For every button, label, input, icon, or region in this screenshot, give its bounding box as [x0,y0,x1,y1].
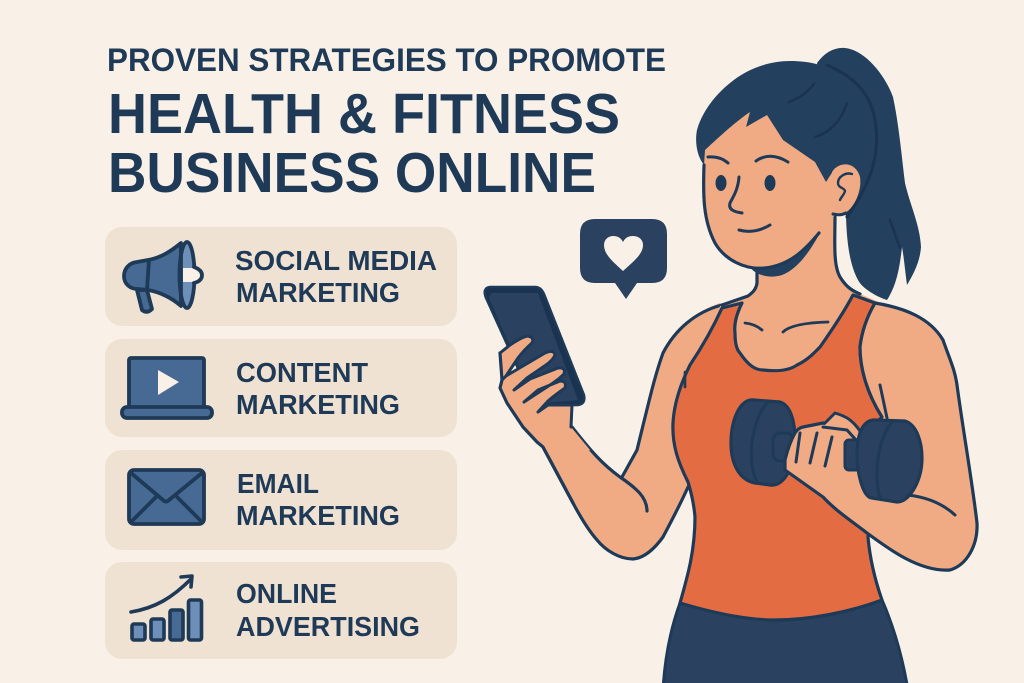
phone [485,287,584,406]
title line 3: BUSINESS ONLINE [108,141,596,205]
illustration: woman with phone and dumbbell [485,48,977,683]
icon: growth chart [131,576,202,640]
dumbbell left plate and handle [731,400,795,485]
label: MARKETING [236,277,400,308]
label: ONLINE [236,578,337,609]
icon: megaphone [124,242,202,312]
left arm [543,303,740,559]
label [236,578,420,642]
ear [832,164,860,215]
chin shadow [750,233,820,277]
panel: content marketing [105,339,457,437]
eyebrows [708,156,788,163]
hand holding phone [500,336,590,503]
panel: social media marketing [105,227,457,326]
icon: envelope [129,470,204,524]
label [236,357,400,420]
label [235,245,437,308]
panel: online advertising [105,562,457,659]
orange tank top [673,295,882,620]
nose [730,177,742,213]
smile [739,225,770,231]
label: SOCIAL MEDIA [235,245,437,276]
label: MARKETING [236,500,400,531]
face [704,90,850,268]
neck and chest [700,215,881,400]
title line 1: PROVEN STRATEGIES TO PROMOTE [107,42,666,78]
label: EMAIL [237,468,319,499]
panel: email marketing [105,450,457,550]
label: CONTENT [236,357,368,388]
title [107,42,666,205]
thumb [825,413,862,445]
title line 2: HEALTH & FITNESS [108,82,620,146]
right arm and fist [785,303,977,570]
armpit tick [684,372,686,387]
icon: heart speech bubble [580,219,667,299]
icon: laptop with play button [122,358,212,418]
ponytail [817,48,921,300]
label: MARKETING [236,389,400,420]
label: ADVERTISING [236,611,420,642]
eyes [716,175,726,191]
dumbbell right plate and handle [845,420,955,515]
hair [696,61,878,217]
shorts [663,600,908,683]
label [236,468,400,531]
